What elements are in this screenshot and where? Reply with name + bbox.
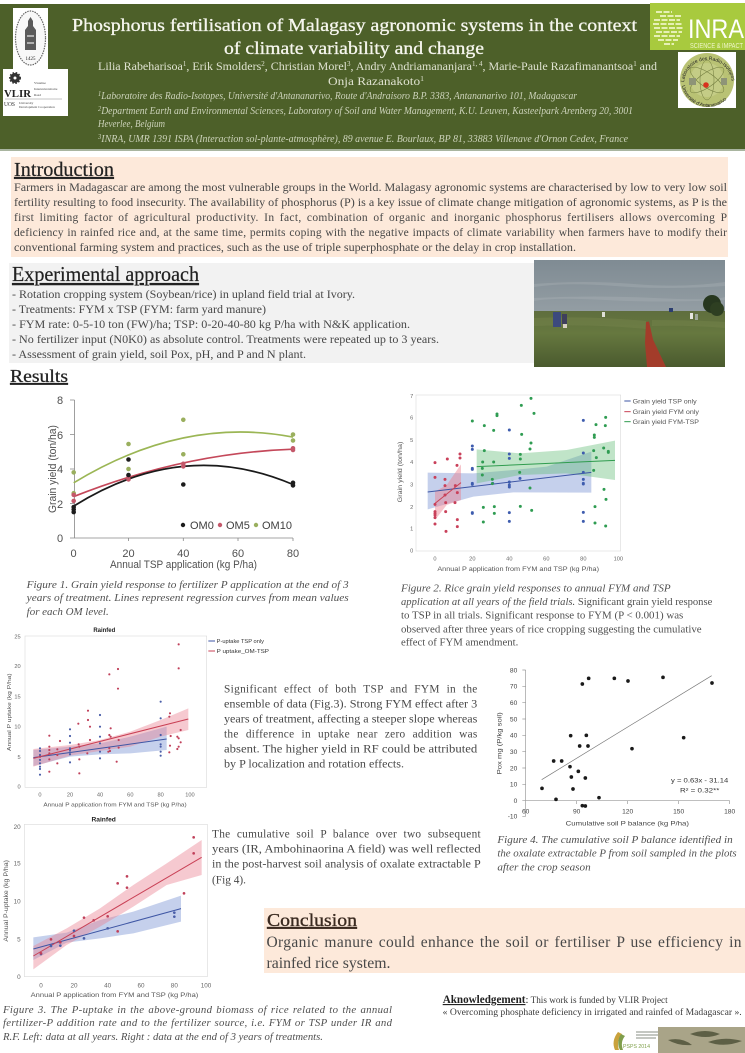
heading: results: Results <box>10 366 68 386</box>
legend <box>624 398 700 426</box>
authors: 2 <box>261 60 265 68</box>
figure 1 caption: for each OM level. <box>27 606 109 618</box>
regression equation <box>671 778 729 795</box>
figure 2 caption: Figure 2. Rice grain yield responses to annual FYM and TSP <box>400 583 671 594</box>
data points <box>542 677 712 806</box>
axis tick labels: 5 <box>410 438 413 444</box>
axis tick labels: 180 <box>724 808 736 815</box>
y axis title: Annual P-uptake (kg P/ha) <box>4 860 10 942</box>
authors: Lilia Rabeharisoa <box>98 59 183 73</box>
axis tick labels: 0 <box>433 557 437 563</box>
figure 1 caption: years of treatment. Lines represent regression curves from mean values <box>26 592 349 604</box>
axis tick labels: 5 <box>17 937 21 944</box>
axis tick labels: 10 <box>510 782 518 789</box>
text block: significant effect: by P localization and rotation effects. <box>224 759 404 771</box>
axis tick labels: 20 <box>67 793 73 799</box>
figure 2 caption: observed after three years of rice cropping suggesting the cumulative <box>401 624 702 635</box>
figure 2 caption <box>400 583 713 648</box>
regression lines <box>33 857 202 956</box>
authors: , Marie-Paule Razafimanantsoa <box>482 59 634 73</box>
trend line <box>542 676 712 780</box>
logo: university seal: 1425 <box>26 57 36 62</box>
text block: significant effect <box>224 684 478 771</box>
data points <box>74 420 293 512</box>
data points <box>40 644 181 775</box>
panel: experimental approach <box>9 262 534 363</box>
text block: significant effect: absent. The higher yield in RF could be attributed <box>224 744 478 756</box>
axis tick labels: 50 <box>510 716 518 723</box>
regression lines <box>428 460 615 503</box>
regression curves <box>74 432 293 506</box>
axis tick labels: 5 <box>18 755 21 761</box>
axis tick labels <box>14 634 195 799</box>
axis tick labels <box>14 824 212 989</box>
legend: OM10 <box>262 520 292 532</box>
authors: , Andry Andriamananjara <box>350 59 473 73</box>
logo: INRA <box>650 3 745 50</box>
axis tick labels: 40 <box>97 793 103 799</box>
y axis title: Pox mg (P/kg soil) <box>497 712 504 774</box>
figure 4 chart: Pox vs soil P balance <box>497 667 736 828</box>
axis tick labels: 6 <box>57 430 63 442</box>
figure 3 left chart: P uptake, all years <box>7 628 269 808</box>
logo: Laboratoire des Radio-Isotopes: Université d'Antananarivo <box>682 85 726 107</box>
authors: and <box>637 59 657 73</box>
axis tick labels: 60 <box>522 808 530 815</box>
figure 4 caption: after the crop season <box>497 862 591 873</box>
axis tick labels: 0 <box>39 982 43 989</box>
axis tick labels: 1 <box>410 527 413 533</box>
axis tick labels: 15 <box>14 695 21 701</box>
axis tick labels: 4 <box>410 460 413 466</box>
acknowledgement: Aknowledgement: This work is funded by VLIR Project <box>443 994 668 1006</box>
plot frame <box>24 824 207 977</box>
x axis title: Annual TSP application (kg P/ha) <box>110 559 257 571</box>
axis tick labels: 20 <box>14 824 21 831</box>
figure 1 chart: grain yield vs TSP <box>47 395 299 571</box>
axis tick labels: 0 <box>70 548 77 560</box>
authors: 1 <box>183 60 187 68</box>
axis tick labels: 7 <box>410 394 413 400</box>
axis tick labels: -10 <box>508 814 518 821</box>
heading: introduction: Introduction <box>14 160 114 181</box>
axis tick labels: 80 <box>158 793 164 799</box>
figure 2 chart: grain yield vs FYM and TSP <box>398 394 700 573</box>
axis tick labels: 70 <box>510 684 518 691</box>
axis tick labels: 20 <box>70 982 78 989</box>
legend <box>208 639 269 655</box>
confidence bands <box>33 708 188 767</box>
axes <box>70 400 293 541</box>
figure 3 caption <box>2 1004 393 1043</box>
axis tick labels: 60 <box>543 557 549 563</box>
chart title: Rainfed <box>91 816 116 823</box>
authors: Onja Razanakoto <box>328 74 411 88</box>
axis tick labels <box>57 395 299 560</box>
axis tick labels: 10 <box>14 898 21 905</box>
confidence bands <box>33 840 202 969</box>
photo: rice field trial <box>534 260 725 367</box>
logo: PSPS 2014 conference banner: PSPS 2014 <box>623 1044 650 1050</box>
x axis title: Cumulative soil P balance (kg P/ha) <box>566 821 689 828</box>
legend: Grain yield TSP only <box>633 398 698 405</box>
axis tick labels: 100 <box>185 793 195 799</box>
axis tick labels: 100 <box>614 557 623 563</box>
affiliations: 1 <box>98 90 101 98</box>
figure 3 caption: fertilizer-P addition rate and to the fertilizer source, i.e. FYM or TSP under IR and <box>3 1017 393 1029</box>
text block: significant effect: ensemble of data (Fig.3). Strong FYM effect after 3 <box>224 699 478 711</box>
legend: OM0 <box>190 520 214 532</box>
legend <box>181 520 292 532</box>
logo: VLIR-UOS: University <box>19 101 34 105</box>
axis tick labels: 80 <box>171 982 178 989</box>
heading: experimental approach: Experimental approach <box>12 262 199 286</box>
authors: 3 <box>347 60 351 68</box>
acknowledgement <box>443 994 742 1018</box>
figure 3 caption: R.F. Left: data at all years. Right : data at the end of 3 years of treatments. <box>2 1031 323 1043</box>
text block: significant effect: Significant effect of both TSP and FYM in the <box>224 684 477 696</box>
panel: conclusion <box>264 908 745 973</box>
conclusion text: Organic manure could enhance the soil or fertiliser P use efficiency in <box>266 934 742 951</box>
axis tick labels: 15 <box>14 861 21 868</box>
figure 3 caption: Figure 3. The P-uptake in the above-ground biomass of rice related to the annual <box>2 1004 392 1016</box>
text block: cumulative soil P balance: in the post-harvest soil analysis of oxalate extractable P <box>212 859 481 871</box>
axis tick labels: 4 <box>57 464 63 476</box>
experimental approach list: - Treatments: FYM x TSP (FYM: farm yard manure) <box>12 302 266 316</box>
axis tick labels: 3 <box>410 482 413 488</box>
axis tick labels: 40 <box>177 548 189 560</box>
axis tick labels: 0 <box>38 793 42 799</box>
x axis title: Annual P application from FYM and TSP (kg P/ha) <box>437 567 599 573</box>
axis tick labels: 150 <box>673 808 685 815</box>
experimental approach list: - Assessment of grain yield, soil Pox, pH, and P and N plant. <box>12 347 306 361</box>
authors <box>98 59 657 88</box>
authors: , Erik Smolders <box>186 59 262 73</box>
introduction text: Farmers in Madagascar are among the most vulnerable groups in the World. Malagasy agronomic systems are characterised by low to very low soil <box>14 182 727 194</box>
axis tick labels: 6 <box>410 416 413 422</box>
axis tick labels: 0 <box>17 974 21 981</box>
axis tick labels: 25 <box>14 634 21 640</box>
figure 3 right chart: P uptake, end of 3 years <box>4 816 212 999</box>
title <box>72 15 637 58</box>
authors: 1 <box>420 75 425 83</box>
legend: P-uptake TSP only <box>217 639 264 645</box>
acknowledgement: « Overcoming phosphate deficiency in irrigated and rainfed of Madagascar ». <box>443 1007 742 1018</box>
affiliations: Department Earth and Environmental Sciences, Laboratory of Soil and Water Management, K.U. Leuven, Kasteelpark Arenberg 20, 3001 <box>100 106 633 117</box>
axis tick labels: 120 <box>622 808 634 815</box>
regression equation: y = 0.63x - 31.14 <box>671 778 729 785</box>
y axis title: Annual P uptake (kg P/ha) <box>7 673 13 751</box>
logo: PSPS 2014 conference banner <box>614 1027 745 1053</box>
text block: significant effect: years of treatment, affecting a steeper slope whereas <box>224 714 477 726</box>
logo: VLIR-UOS: VLIR <box>4 88 32 100</box>
figure 4 caption: Figure 4. The cumulative soil P balance identified in <box>496 835 733 846</box>
introduction text: conventional farming system and practices, such as the use of triple superphosphate or the delay in crop installation. <box>14 242 576 254</box>
conclusion text <box>266 934 742 972</box>
axis tick labels: 80 <box>580 557 586 563</box>
axis tick labels <box>410 394 623 563</box>
legend: Grain yield FYM only <box>633 409 700 416</box>
affiliations: 2 <box>98 105 102 113</box>
y axis title: Grain yield (ton/ha) <box>398 442 404 502</box>
heading: conclusion: Conclusion <box>267 910 357 930</box>
axis tick labels <box>508 667 736 821</box>
axis tick labels: 80 <box>287 548 299 560</box>
introduction text: deficiency in rainfed rice and, at the same time, permits coping with the negative impacts of climate variability when farmers have to modify their <box>14 227 727 239</box>
axis tick labels: 40 <box>506 557 512 563</box>
legend: Grain yield FYM-TSP <box>633 419 699 426</box>
axis tick labels: 8 <box>57 395 63 407</box>
axis tick labels: 40 <box>510 733 518 740</box>
logo: VLIR-UOS: Development Cooperation <box>19 105 55 109</box>
header banner <box>0 4 745 151</box>
title: Phosphorus fertilisation of Malagasy agronomic systems in the context <box>72 15 637 35</box>
axis tick labels: 10 <box>14 725 21 731</box>
logo: Laboratoire des Radio-Isotopes: Laboratoire des Radio-Isotopes <box>680 56 734 82</box>
experimental approach list: - Rotation cropping system (Soybean/rice) in upland field trial at Ivory. <box>12 287 355 301</box>
axis tick labels: 60 <box>510 700 518 707</box>
regression equation: R² = 0.32** <box>680 788 720 795</box>
axis tick labels: 20 <box>122 548 135 560</box>
authors: , Christian Morel <box>265 59 348 73</box>
x axis title: Annual P application from FYM and TSP (kg P/ha) <box>31 993 198 999</box>
axis tick labels: 60 <box>127 793 133 799</box>
axis tick labels: 100 <box>201 982 212 989</box>
introduction text: first limiting factor of agricultural productivity. In fact, combination of organic and inorganic phosphorus fertilisers allows overcoming P <box>14 212 727 224</box>
y axis title: Grain yield (ton/ha) <box>47 425 59 513</box>
chart title: Rainfed <box>93 628 116 634</box>
logo: VLIR-UOS: UOS <box>4 102 15 108</box>
axis tick labels: 0 <box>57 533 63 545</box>
plot frame <box>416 395 621 551</box>
confidence bands <box>428 441 615 520</box>
axis tick labels: 30 <box>510 749 518 756</box>
affiliations: INRA, UMR 1391 ISPA (Interaction sol-plante-atmosphère), 89 avenue E. Bourlaux, BP 81, 33883 Villenave d'Ornon Cedex, France <box>100 134 628 145</box>
experimental approach list: - FYM rate: 0-5-10 ton (FW)/ha; TSP: 0-20-40-80 kg P/ha with N&K application. <box>12 317 410 331</box>
text block: cumulative soil P balance <box>212 829 482 886</box>
affiliations <box>97 90 633 145</box>
logo: VLIR-UOS: Raad <box>34 93 41 97</box>
logo: Laboratoire des Radio-Isotopes <box>678 52 736 108</box>
axis tick labels: 0 <box>410 548 413 554</box>
experimental approach list: - No fertilizer input (N0K0) as absolute control. Treatments were repeated up to 3 years. <box>12 332 439 346</box>
regression lines <box>33 719 188 758</box>
figure 2 caption: to TSP in all trials. Significant response to FYM (P < 0.001) was <box>401 611 683 622</box>
figure 4 caption: the oxalate extractable P from soil sampled in the plots <box>497 848 737 859</box>
introduction text: fertility resulting to food insecurity. The availability of phosphorus (P) is a key issue of climate change mitigation of agronomic systems, as P is the <box>14 197 727 209</box>
axis tick labels: 0 <box>18 785 21 791</box>
axis tick labels: 90 <box>573 808 581 815</box>
axis tick labels: 60 <box>232 548 244 560</box>
plot frame <box>25 636 207 787</box>
logo: VLIR-UOS: Interuniversitaire <box>34 87 58 91</box>
axis tick labels: 0 <box>514 798 518 805</box>
axis tick labels: 2 <box>410 505 413 511</box>
title: of climate variability and change <box>224 38 484 58</box>
figure 4 caption <box>496 835 737 873</box>
legend: OM5 <box>226 520 250 532</box>
affiliations: 3 <box>97 133 102 141</box>
text block: significant effect: the difference in uptake near zero addition was <box>224 729 477 741</box>
axis tick labels: 20 <box>14 664 21 670</box>
text block: cumulative soil P balance: (Fig 4). <box>212 874 246 886</box>
axis tick labels: 20 <box>510 765 518 772</box>
logo: VLIR-UOS: Vlaamse <box>34 81 46 85</box>
conclusion text: rainfed rice system. <box>266 955 390 972</box>
logo: VLIR-UOS <box>3 69 68 116</box>
affiliations: Heverlee, Belgium <box>97 119 165 130</box>
logo: university seal <box>13 8 48 70</box>
figure 1 caption <box>26 579 349 618</box>
panel: introduction <box>11 157 728 257</box>
axis tick labels: 2 <box>57 499 63 511</box>
text block: cumulative soil P balance: The cumulative soil P balance over two subsequent <box>212 829 482 841</box>
axes <box>522 670 730 816</box>
figure 2 caption: application at all years of the field trials. Significant grain yield response <box>401 597 713 608</box>
legend: P uptake_OM-TSP <box>217 649 269 655</box>
axis tick labels: 20 <box>469 557 475 563</box>
data points <box>41 837 194 954</box>
authors: 1 <box>633 60 637 68</box>
data points <box>435 398 608 531</box>
figure 1 caption: Figure 1. Grain yield response to fertilizer P application at the end of 3 <box>26 579 349 591</box>
authors: 1, 4 <box>472 60 483 68</box>
figure 2 caption: effect of FYM amendment. <box>401 637 518 648</box>
introduction text <box>14 182 727 254</box>
axis tick labels: 80 <box>510 667 518 674</box>
axis tick labels: 60 <box>137 982 145 989</box>
x axis title: Annual P application from FYM and TSP (kg P/ha) <box>43 802 187 808</box>
experimental approach list <box>12 287 439 361</box>
text block: cumulative soil P balance: years (IR, Ambohinaorina A field) was well reflected <box>212 844 481 856</box>
affiliations: Laboratoire des Radio-Isotopes, Université d'Antananarivo, Route d'Andraisoro B.P. 3383, Antananarivo 101, Madagascar <box>100 91 578 102</box>
axis tick labels: 40 <box>104 982 112 989</box>
